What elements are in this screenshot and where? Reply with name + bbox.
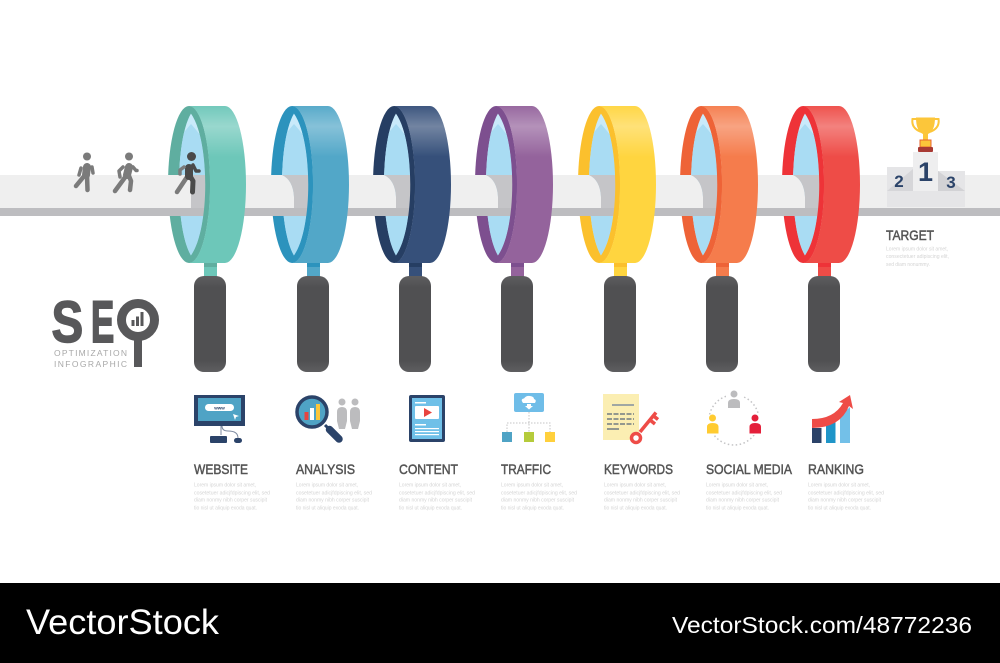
text block: ranking [808,461,884,512]
text block: keywords: KEYWORDS [604,461,673,477]
logo: SEO optimization infographic: E [91,291,114,355]
text block: content: Lorem ipsum dolor sit amet, [399,482,461,488]
magnifier: traffic [470,106,553,372]
footer bar with watermark: VectorStock [26,603,220,642]
text block: website: cosetetuer adicjfdpiscing elit, sed [194,490,270,496]
walker: third figure entering lens [177,152,199,192]
text block: target: consectetuer adipiscing elit, [886,254,949,260]
text block: ranking: tio nisl ut aliquip exoda quat. [808,506,871,512]
walker: second figure [115,152,137,191]
magnifier: ranking [777,106,860,372]
text block: analysis: Lorem ipsum dolor sit amet, [296,482,358,488]
magnifier: content [368,106,451,372]
text block: social media: Lorem ipsum dolor sit amet, [706,482,768,488]
icon: social media people circle [704,390,764,445]
icon: keywords document and key [603,394,658,442]
text block: traffic: TRAFFIC [501,461,551,477]
text block: social media: diam nonmy nibh corper suscipit [706,498,780,504]
icon: trophy [912,118,939,152]
road [0,175,1000,216]
text block: target: sed diam nonummy. [886,262,930,268]
text block: website: diam nonmy nibh corper suscipit [194,498,268,504]
text block: analysis: ANALYSIS [296,461,355,477]
text block: traffic: Lorem ipsum dolor sit amet, [501,482,563,488]
text block: ranking: Lorem ipsum dolor sit amet, [808,482,870,488]
text block: website: tio nisl ut aliquip exoda quat. [194,506,257,512]
text block: content: CONTENT [399,461,458,477]
text block: website: Lorem ipsum dolor sit amet, [194,482,256,488]
podium with ranks [887,152,965,207]
text block: analysis: tio nisl ut aliquip exoda quat. [296,506,359,512]
footer bar with watermark: VectorStock.com/48772236 [672,612,972,638]
text block: keywords: Lorem ipsum dolor sit amet, [604,482,666,488]
icon: website monitor: www [213,406,225,410]
text block: keywords: tio nisl ut aliquip exoda quat. [604,506,667,512]
text block: ranking: RANKING [808,461,864,477]
walker: first figure [76,152,93,190]
text block: content: diam nonmy nibh corper suscipit [399,498,473,504]
icon: traffic cloud network [502,393,555,442]
text block: social media [706,461,793,512]
text block: social media: SOCIAL MEDIA [706,461,793,477]
magnifier: social media [675,106,758,372]
icon: content tablet [409,395,445,442]
icon: analysis magnifier and people [297,397,360,439]
podium with ranks: 2 [894,172,904,191]
text block: target: TARGET [886,227,934,243]
road end: website lens [160,175,191,208]
magnifier: keywords [573,106,656,372]
icon: ranking bars and arrow [812,395,853,443]
text block: traffic: cosetetuer adicjfdpiscing elit, sed [501,490,577,496]
podium with ranks: 3 [946,173,956,192]
logo: SEO optimization infographic: S [52,291,83,355]
magnifier: website [163,106,246,372]
text block: ranking: diam nonmy nibh corper suscipit [808,498,882,504]
text block: social media: tio nisl ut aliquip exoda quat. [706,506,769,512]
text block: traffic: tio nisl ut aliquip exoda quat. [501,506,564,512]
icon: website monitor [194,395,245,443]
text block: keywords: cosetetuer adicjfdpiscing elit, sed [604,490,680,496]
text block: analysis: diam nonmy nibh corper suscipit [296,498,370,504]
text block: content [399,461,475,512]
text block: analysis: cosetetuer adicjfdpiscing elit, sed [296,490,372,496]
podium with ranks: 1 [918,157,933,187]
text block: analysis [296,461,372,512]
text block: social media: cosetetuer adicjfdpiscing elit, sed [706,490,782,496]
text block: content: tio nisl ut aliquip exoda quat. [399,506,462,512]
logo: SEO optimization infographic: INFOGRAPHIC [54,359,127,369]
text block: ranking: cosetetuer adicjfdpiscing elit, sed [808,490,884,496]
text block: target: Lorem ipsum dolor sit amet, [886,246,948,252]
logo: SEO optimization infographic [52,291,154,369]
footer bar with watermark [0,583,1000,663]
text block: keywords [604,461,680,512]
text block: target [886,227,949,268]
text block: keywords: diam nonmy nibh corper suscipit [604,498,678,504]
magnifier: analysis [266,106,349,372]
text block: website: WEBSITE [194,461,248,477]
text block: traffic [501,461,577,512]
text block: website [194,461,270,512]
text block: traffic: diam nonmy nibh corper suscipit [501,498,575,504]
logo: SEO optimization infographic: OPTIMIZATION [54,348,127,358]
text block: content: cosetetuer adicjfdpiscing elit, sed [399,490,475,496]
